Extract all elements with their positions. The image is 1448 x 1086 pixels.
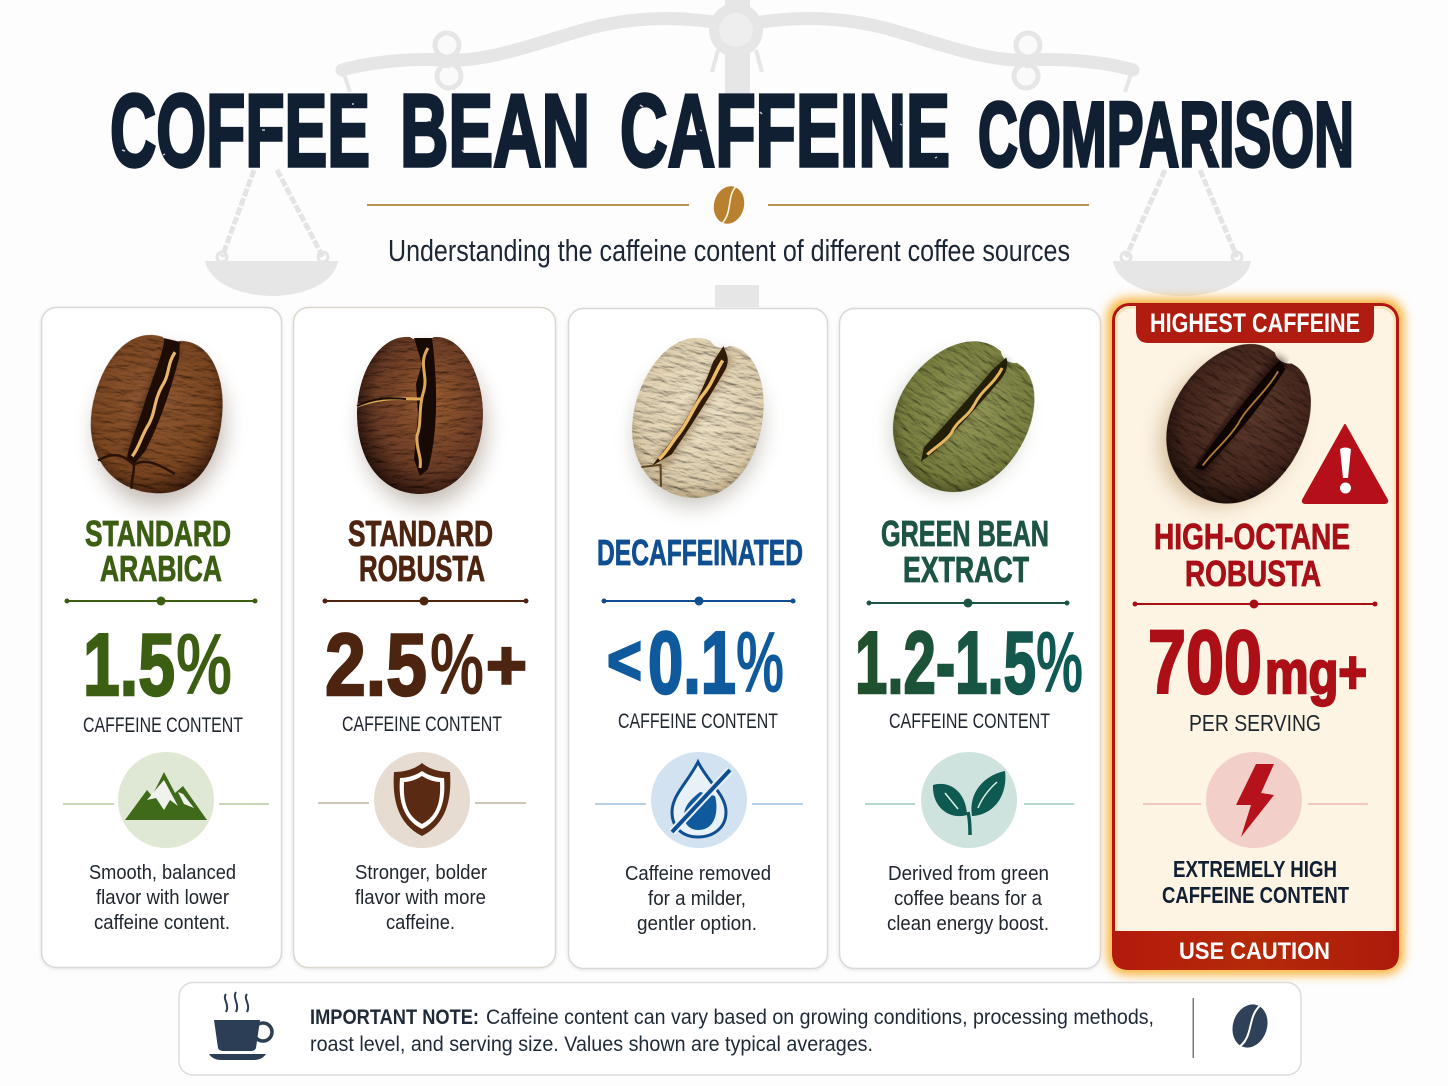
heading: high-octane robusta — [1154, 516, 1350, 594]
description: for a milder, — [648, 887, 746, 910]
heading: standard arabica: STANDARD — [85, 513, 231, 554]
value: <0.1% — [607, 613, 784, 712]
heading: standard robusta: STANDARD — [348, 513, 493, 554]
icon: robusta bean — [357, 337, 486, 506]
description: clean energy boost. — [887, 912, 1049, 935]
banner: highest caffeine: HIGHEST CAFFEINE — [1150, 308, 1360, 338]
icon: mountain — [63, 752, 269, 848]
icon: warning triangle — [1303, 425, 1387, 503]
heading: standard arabica — [85, 513, 231, 589]
title — [110, 73, 1354, 188]
banner: use caution: USE CAUTION — [1179, 938, 1330, 965]
description: Smooth, balanced — [89, 861, 236, 884]
panel: decaffeinated — [568, 308, 828, 968]
value: 1.5%: % — [176, 617, 232, 713]
label: CAFFEINE CONTENT — [618, 710, 778, 733]
description: caffeine. — [386, 911, 455, 934]
label: CAFFEINE CONTENT — [342, 713, 502, 736]
label: CAFFEINE CONTENT — [889, 710, 1050, 733]
banner: use caution — [1112, 931, 1399, 970]
value: 2.5%+: % — [430, 617, 484, 713]
panel: high-octane robusta — [1107, 298, 1404, 975]
heading: standard robusta: ROBUSTA — [359, 548, 485, 589]
icon: note bean — [1227, 1000, 1273, 1052]
description — [89, 861, 236, 934]
description: flavor with lower — [96, 886, 229, 909]
divider — [322, 596, 528, 606]
icon: water drop crossed out — [595, 752, 803, 848]
divider — [602, 596, 796, 606]
note text: roast level, and serving size. Values shown are typical averages. — [310, 1033, 873, 1056]
description: Stronger, bolder — [355, 861, 487, 884]
value: 1.2-1.5%: 1.2-1.5 — [855, 613, 1036, 712]
description: caffeine content. — [94, 911, 230, 934]
subtitle: Understanding the caffeine content of different coffee sources — [388, 233, 1070, 268]
description: Derived from green — [888, 862, 1049, 885]
icon: shield — [318, 752, 526, 848]
warning text: CAFFEINE CONTENT — [1162, 882, 1349, 908]
value: 2.5%+: 2.5 — [325, 615, 427, 714]
icon: decaf bean — [613, 326, 782, 520]
description — [887, 862, 1049, 935]
banner: highest caffeine — [1136, 304, 1374, 343]
background scales watermark — [205, 0, 1251, 307]
note text: Caffeine content can vary based on growing conditions, processing methods, — [486, 1006, 1154, 1029]
title: BEAN — [400, 73, 590, 188]
description — [625, 862, 771, 935]
warning text: EXTREMELY HIGH — [1173, 856, 1337, 882]
value: 2.5%+ — [325, 615, 527, 714]
value: <0.1%: < — [607, 621, 642, 699]
value: 1.5%: 1.5 — [83, 615, 175, 714]
description: Caffeine removed — [625, 862, 771, 885]
heading: high-octane robusta: HIGH-OCTANE — [1154, 516, 1350, 557]
divider — [866, 598, 1070, 608]
icon: leaves — [865, 752, 1074, 848]
description — [355, 861, 487, 934]
heading: decaffeinated: DECAFFEINATED — [597, 532, 803, 573]
divider — [1132, 600, 1378, 608]
title: COFFEE — [110, 73, 370, 188]
panel: standard robusta — [294, 308, 556, 968]
value: 2.5%+: + — [486, 626, 527, 704]
value: 700mg+: 700 — [1148, 613, 1262, 713]
label: CAFFEINE CONTENT — [83, 714, 243, 737]
description: gentler option. — [637, 912, 757, 935]
heading: standard arabica: ARABICA — [100, 548, 222, 589]
icon: dark bean — [1135, 321, 1337, 534]
icon: lightning bolt — [1143, 752, 1368, 848]
note text — [310, 1006, 1154, 1056]
title: CAFFEINE — [620, 73, 950, 188]
description: coffee beans for a — [894, 887, 1043, 910]
value: 700mg+: mg+ — [1265, 639, 1367, 706]
heading: green bean extract — [881, 513, 1049, 590]
value: 1.2-1.5%: % — [1036, 615, 1083, 711]
value: <0.1%: 0.1 — [648, 613, 736, 712]
heading: high-octane robusta: ROBUSTA — [1185, 553, 1321, 594]
heading: standard robusta — [348, 513, 493, 589]
heading: green bean extract: GREEN BEAN — [881, 513, 1049, 554]
panel: important note — [179, 982, 1301, 1075]
description: flavor with more — [355, 886, 486, 909]
divider — [64, 596, 258, 606]
icon: green bean — [864, 318, 1060, 519]
label: PER SERVING — [1189, 710, 1321, 736]
icon: coffee cup — [209, 992, 272, 1060]
value: 700mg+ — [1148, 613, 1367, 713]
note text: IMPORTANT NOTE: — [310, 1006, 479, 1029]
heading: green bean extract: EXTRACT — [903, 549, 1029, 590]
icon: arabica bean — [77, 326, 239, 517]
title divider with gold bean — [367, 183, 1089, 227]
warning text — [1162, 856, 1349, 908]
value: <0.1%: % — [736, 615, 784, 711]
panel: standard arabica — [42, 308, 282, 968]
panel: green bean extract — [840, 308, 1100, 968]
